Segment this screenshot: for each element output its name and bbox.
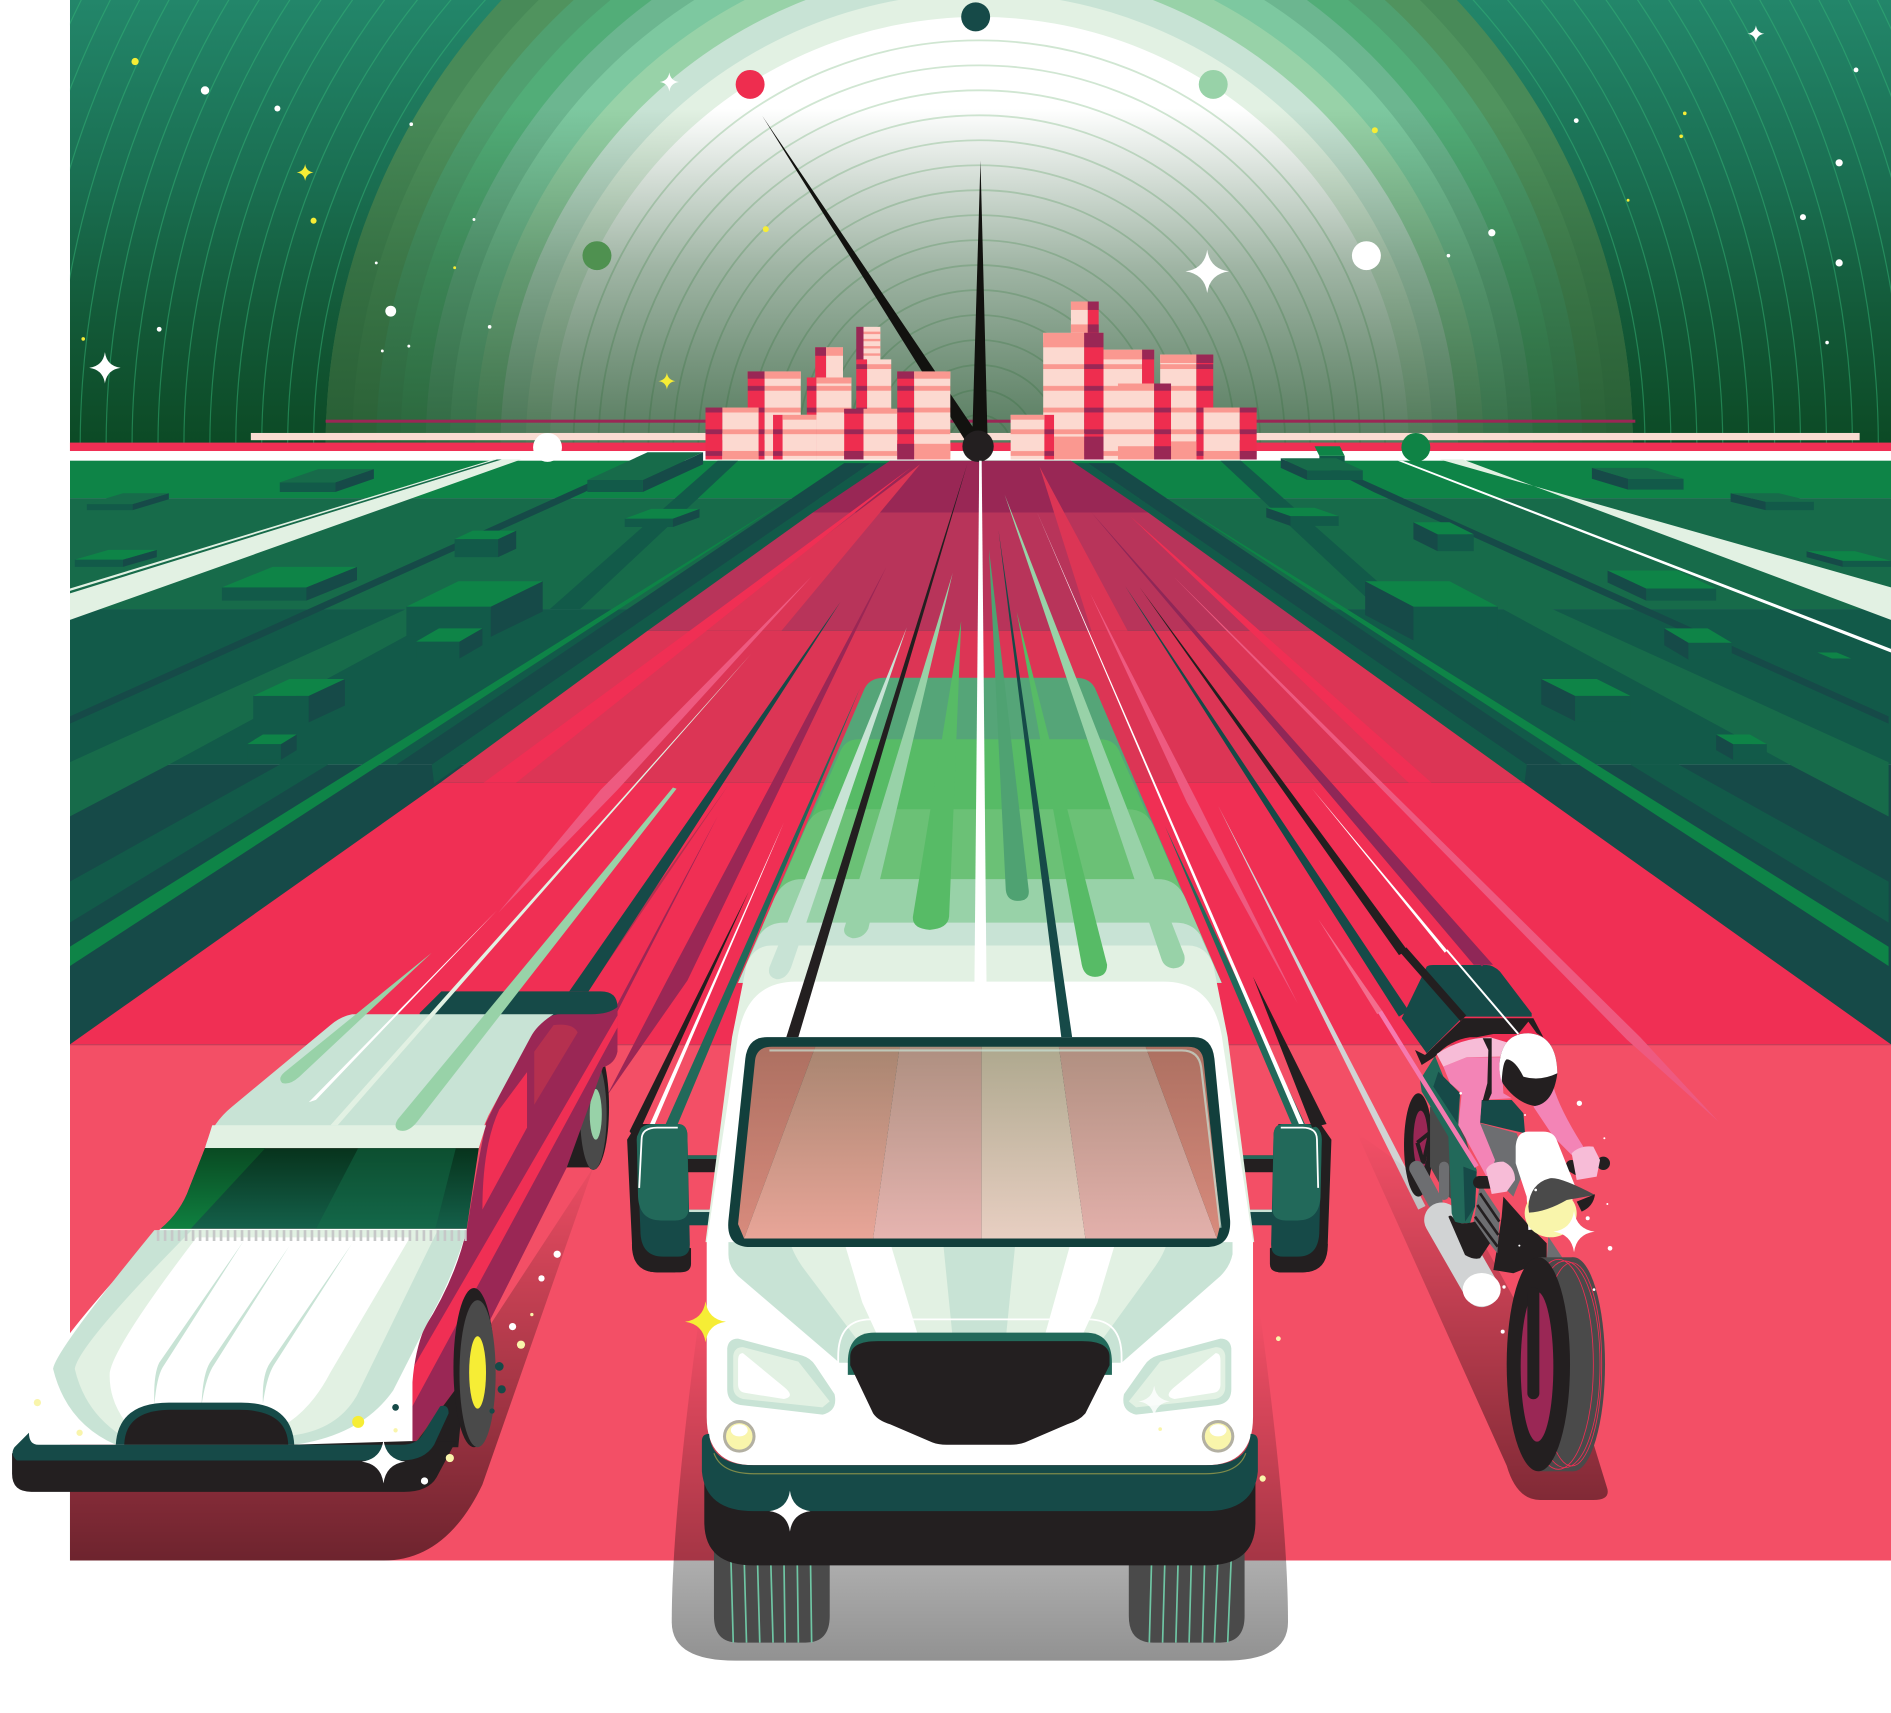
van: mirror arms [685, 1155, 1276, 1225]
moto: rays over rider [1380, 950, 1518, 1167]
van: bumper [702, 1434, 1258, 1565]
stars: small dots [81, 58, 1858, 352]
city skyline right [1011, 302, 1257, 459]
ground blocks right [1266, 446, 1891, 760]
moto: rider torso and arm [1437, 1037, 1512, 1180]
car [12, 991, 617, 1492]
horizon markers [533, 433, 1430, 462]
clock dome rings [326, 0, 1633, 443]
moto: cargo box [1402, 950, 1543, 1065]
moto: fairing [1516, 1132, 1577, 1230]
car: side body [412, 1007, 617, 1445]
road ray toward motorcycle [1125, 586, 1409, 1017]
van: sparkles [685, 1301, 1281, 1532]
city skyline left [706, 327, 950, 459]
white side roads [70, 459, 1891, 652]
road light rays, far group [484, 461, 1719, 1210]
moto: helmet [1499, 1033, 1557, 1106]
car: roof [205, 1014, 554, 1148]
shadow: car [70, 1167, 593, 1561]
moto: engine block [1473, 1100, 1565, 1273]
car: nose intake [116, 1403, 294, 1445]
car: rear wheel [564, 1044, 609, 1170]
shadow: motorcycle [1357, 1133, 1608, 1500]
car: bumper [12, 1406, 456, 1492]
van: left headlight [727, 1339, 835, 1415]
van: wheels [714, 1550, 1245, 1643]
van [627, 678, 1331, 1643]
van: fog lights [723, 1420, 1234, 1453]
car: sparkle and dust [34, 1251, 561, 1485]
car: windshield [160, 1148, 479, 1229]
ground blocks left [75, 452, 703, 760]
car: rear spoiler [420, 991, 617, 1025]
moto: front wheel [1507, 1257, 1605, 1471]
van: grille [838, 1319, 1122, 1445]
van: right headlight [1123, 1339, 1231, 1415]
shadow: van [672, 1315, 1288, 1661]
moto: engine rear [1417, 1107, 1477, 1217]
road [70, 461, 1891, 1561]
background panel: sky [70, 0, 1891, 443]
horizon lines [70, 420, 1891, 461]
motorcycle [1380, 950, 1612, 1471]
white ray to helmet [1312, 789, 1447, 953]
van: body [707, 982, 1253, 1465]
clock hands [762, 116, 988, 444]
moto: headlight [1525, 1178, 1595, 1237]
van: translucent roof bands [706, 678, 1254, 1242]
van: windshield [728, 1037, 1230, 1247]
van: right mirror [1270, 1124, 1331, 1272]
moto: exhaust [1442, 1220, 1501, 1306]
stars: sparkles [89, 25, 1764, 390]
ground: green fields [70, 461, 1891, 1054]
moto: grips [1479, 1157, 1610, 1182]
van: hood rays [728, 1242, 1233, 1363]
moto: rider far arm [1533, 1087, 1583, 1155]
van: left mirror [627, 1124, 691, 1272]
car: front wheel [412, 1288, 496, 1447]
moto: rider boot [1448, 1216, 1490, 1259]
moto: rear wheel [1404, 1093, 1442, 1197]
black ray to cargo box [1140, 587, 1407, 955]
moto: sparkle and dust [1459, 1092, 1612, 1334]
clock pivot [962, 431, 994, 462]
light rays over vehicles [280, 461, 1327, 1140]
clock hour markers [582, 2, 1381, 270]
moto: gloves [1486, 1146, 1600, 1194]
moto: rider leg [1420, 1056, 1477, 1223]
car: hood [18, 1229, 467, 1459]
